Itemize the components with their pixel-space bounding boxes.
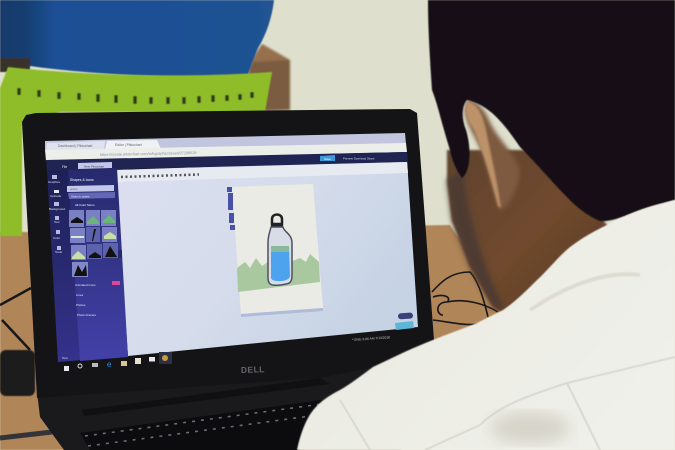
sidebar panel [68, 168, 128, 361]
panel list items [75, 283, 96, 317]
zoom pill [398, 312, 413, 319]
vertical mini toolbar [227, 187, 235, 230]
sidebar icons rail [47, 170, 82, 362]
rail labels: Background [49, 207, 65, 211]
person in white shirt [297, 0, 675, 450]
neck and skin [447, 150, 610, 320]
chair holes [19, 88, 252, 104]
cables on table [0, 272, 498, 438]
laptop lid [22, 109, 434, 398]
pro badge [112, 281, 120, 285]
shape thumbnails grid [69, 210, 118, 277]
screen: Save [324, 157, 331, 161]
dark hair [428, 0, 675, 221]
toolbar [117, 162, 408, 182]
shirt folds [340, 274, 675, 450]
person in blue shirt [0, 0, 274, 77]
save button [320, 155, 335, 161]
panel list items: Animated Icons [75, 283, 96, 287]
rail labels: Uploads [50, 194, 62, 198]
taskbar icons: e [107, 360, 112, 369]
screen: All Color Mono [75, 203, 95, 207]
search box [67, 185, 114, 192]
DELL logo: DELL [241, 364, 265, 375]
grass band [237, 254, 320, 292]
rail labels: Color [53, 236, 60, 240]
screen: Preview Download Share [343, 156, 375, 160]
system tray: ^ ENG 9:06 AM 7/13/2018 [352, 335, 390, 342]
water bottle [268, 214, 292, 285]
panel list items: Photo Frames [77, 313, 96, 317]
green chair [0, 67, 272, 236]
rail labels [48, 175, 68, 360]
hinge band [82, 378, 330, 416]
neck shading [447, 170, 505, 310]
screen: grass [70, 187, 78, 191]
panel list items: Photos [76, 303, 86, 307]
rail labels: Graphics [48, 180, 61, 184]
infographic page [232, 184, 323, 317]
app header bar [46, 152, 408, 171]
canvas area [115, 160, 418, 356]
rail labels: Text [54, 220, 60, 224]
white shirt [297, 200, 675, 450]
browser tabs [46, 140, 161, 151]
shirt shadow [490, 412, 570, 444]
screen: New Piktochart [84, 164, 104, 168]
keyboard keys [85, 404, 322, 446]
browser tabs: Editor | Piktochart [115, 143, 142, 147]
panel heading: Shapes & Icons [70, 178, 94, 182]
rail labels: Tools [55, 250, 63, 254]
wooden shelf [240, 44, 290, 112]
screen: https://create.piktochart.com/infographic/saved/37208029 [100, 151, 196, 157]
browser tab bar [45, 133, 406, 151]
panel list items: Lines [76, 293, 84, 297]
address bar [45, 143, 407, 161]
laptop base and keyboard [37, 338, 434, 450]
screen: Search: grass [71, 194, 90, 198]
ear [465, 100, 519, 210]
blue help button [395, 321, 414, 330]
black adapter [0, 350, 35, 396]
panel collapse tab [118, 250, 122, 258]
rail labels: Tour [62, 356, 68, 360]
ear highlight [466, 102, 501, 208]
keyboard well [80, 400, 322, 450]
taskbar icons [64, 352, 172, 371]
wooden table [0, 225, 520, 450]
laptop [22, 109, 434, 450]
screen [45, 133, 418, 371]
screen: File [62, 165, 67, 169]
browser tabs: Dashboard | Piktochart [58, 144, 92, 148]
